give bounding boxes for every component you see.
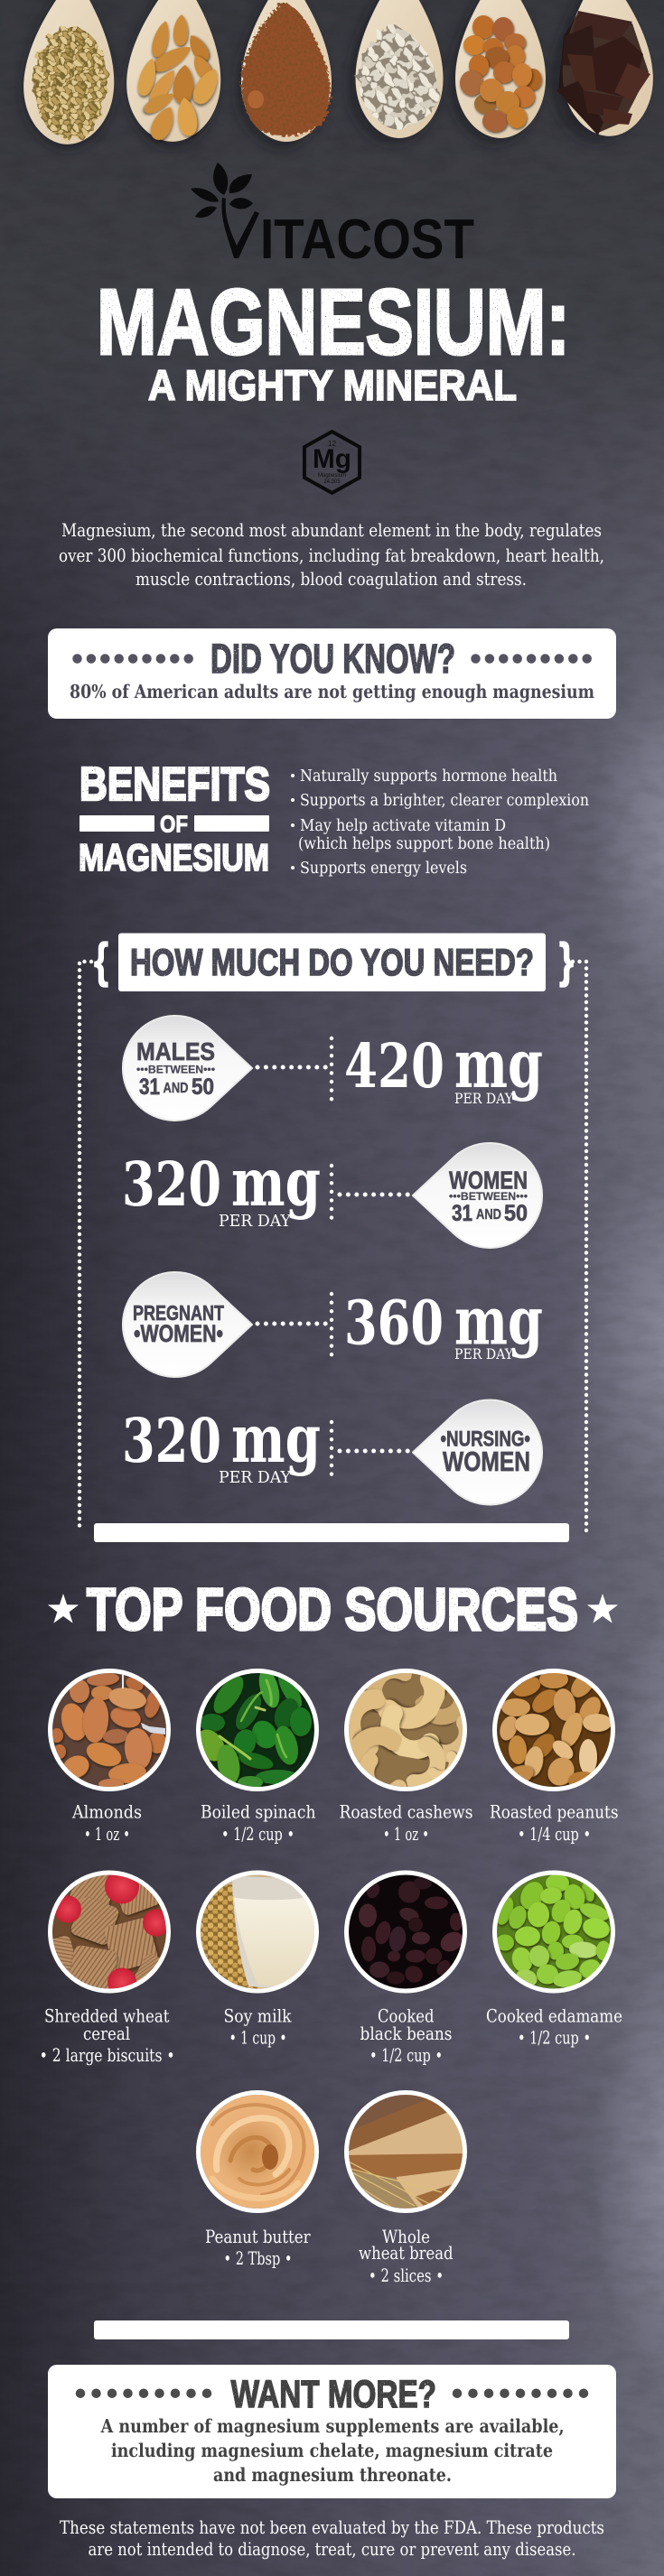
- spoon: dark chocolate: [556, 0, 656, 138]
- food: cooked edamame: • 1/2 cup •: [518, 2028, 591, 2049]
- panel: benefits: [79, 758, 589, 879]
- food: peanut butter: • 2 Tbsp •: [224, 2248, 293, 2269]
- amount: 320 mg: 320: [122, 1149, 221, 1220]
- food: cooked black beans: • 1/2 cup •: [369, 2045, 443, 2066]
- title: [97, 270, 570, 409]
- drop: pregnant women: PREGNANT: [133, 1301, 224, 1325]
- food: roasted cashews: Roasted cashews: [340, 1802, 473, 1822]
- spoon: sunflower seeds: [356, 0, 443, 138]
- spoon shadows: [23, 0, 641, 150]
- amount: 360 mg: mg: [454, 1282, 543, 1360]
- supplements text: A number of magnesium supplements are available,: [100, 2415, 565, 2437]
- spoon: cocoa powder: [241, 0, 332, 142]
- intro text: [59, 520, 604, 590]
- food: almonds: Almonds: [71, 1802, 142, 1822]
- food: whole wheat bread: Whole: [382, 2227, 430, 2247]
- benefits list: Supports energy levels: [300, 860, 467, 878]
- icon: leaves and V stem: [191, 163, 259, 258]
- food: roasted cashews: • 1 oz •: [383, 1824, 429, 1845]
- food: cooked black beans: black beans: [360, 2023, 452, 2044]
- row: women 31-50: PER DAY: [219, 1212, 292, 1231]
- title: A MIGHTY MINERAL: [148, 361, 517, 409]
- supplements text: and magnesium threonate.: [213, 2464, 452, 2486]
- food: peanut butter: Peanut butter: [205, 2227, 311, 2247]
- row: males: PER DAY: [454, 1090, 513, 1107]
- row: women 31-50: [122, 1143, 542, 1248]
- disclaimer: are not intended to diagnose, treat, cure or prevent any disease.: [89, 2539, 576, 2560]
- benefits list: Supports a brighter, clearer complexion: [300, 792, 589, 810]
- food: cooked black beans: [342, 1869, 469, 2066]
- food: roasted peanuts: Roasted peanuts: [490, 1802, 618, 1822]
- drop: pregnant women: •WOMEN•: [134, 1320, 223, 1347]
- drop: males: 31: [139, 1074, 160, 1100]
- drop: males: MALES: [136, 1037, 215, 1065]
- amount: 420 mg: 420: [344, 1030, 444, 1102]
- row: nursing women: PER DAY: [219, 1468, 292, 1487]
- food: shredded wheat cereal: • 2 large biscuits •: [40, 2045, 175, 2066]
- drop: women between 31 and 50: [413, 1143, 542, 1248]
- drop: women between 31 and 50: WOMEN: [449, 1167, 528, 1194]
- logo: Vitacost: [191, 163, 474, 271]
- spoon: buckwheat: [21, 0, 120, 146]
- panel: want more: [48, 2365, 616, 2498]
- food: cooked black beans: Cooked: [378, 2006, 434, 2027]
- divider bar: [94, 2320, 569, 2339]
- heading box: [94, 934, 574, 991]
- food: soy milk: • 1 cup •: [229, 2028, 287, 2049]
- amount: 420 mg: [344, 1026, 543, 1103]
- food: almonds: [46, 1667, 173, 1845]
- panel: did you know: [48, 628, 616, 719]
- intro text: muscle contractions, blood coagulation and stress.: [136, 569, 527, 590]
- food: cooked edamame: [486, 1869, 622, 2049]
- heading: want more: WANT MORE?: [231, 2373, 436, 2416]
- row: pregnant women: PER DAY: [454, 1345, 513, 1362]
- spoon: almonds: [124, 0, 226, 144]
- food: soy milk: [194, 1869, 321, 2049]
- food: almonds: • 1 oz •: [84, 1824, 130, 1845]
- benefits list: May help activate vitamin D: [300, 817, 506, 835]
- drop: nursing women: [413, 1400, 542, 1504]
- heading box: }: [559, 934, 574, 988]
- icon: Mg hexagon element: 24.305: [323, 479, 341, 485]
- heading: benefits of magnesium: [79, 758, 270, 879]
- icon: Mg hexagon element: [304, 432, 360, 493]
- amount: 420 mg: mg: [454, 1026, 543, 1103]
- row: pregnant women: [123, 1272, 543, 1377]
- food: boiled spinach: [191, 1667, 321, 1845]
- amount: 320 mg: mg: [231, 1144, 321, 1222]
- food: boiled spinach: Boiled spinach: [201, 1802, 316, 1822]
- amount: 360 mg: 360: [344, 1288, 444, 1358]
- disclaimer: [60, 2517, 604, 2560]
- drop: women between 31 and 50: 31: [452, 1201, 472, 1226]
- food: roasted peanuts: [490, 1667, 618, 1845]
- supplements text: including magnesium chelate, magnesium citrate: [111, 2440, 553, 2461]
- panel: how much do you need: [79, 934, 586, 1542]
- supplements text: [100, 2415, 565, 2486]
- amount: 360 mg: [344, 1282, 543, 1360]
- drop: women between 31 and 50: •••BETWEEN•••: [449, 1192, 528, 1203]
- icon: Mg hexagon element: Mg: [313, 444, 351, 474]
- drop: males: AND: [163, 1081, 188, 1096]
- drop: males: •••BETWEEN•••: [136, 1065, 215, 1076]
- heading: benefits of magnesium: BENEFITS: [79, 758, 270, 811]
- amount: 320 mg nursing: mg: [231, 1400, 321, 1478]
- drop: males: [123, 1016, 252, 1121]
- heading: did you know: DID YOU KNOW?: [210, 636, 455, 682]
- heading box: HOW MUCH DO YOU NEED?: [130, 941, 534, 983]
- drop: women between 31 and 50: 50: [504, 1201, 528, 1226]
- dotted frame: [79, 962, 586, 1532]
- drop: pregnant women: [123, 1272, 252, 1377]
- food: roasted cashews: [340, 1667, 473, 1845]
- amount: 320 mg nursing: [122, 1400, 321, 1478]
- spoon: hazelnuts: [455, 0, 546, 138]
- food: cooked edamame: Cooked edamame: [486, 2006, 622, 2027]
- closing bar: [94, 1523, 569, 1542]
- spoons with foods: [21, 0, 656, 150]
- food: shredded wheat cereal: [42, 1871, 173, 2066]
- wordmark: ITACOST: [260, 209, 474, 271]
- food: boiled spinach: • 1/2 cup •: [221, 1824, 295, 1845]
- icon: Mg hexagon element: 12: [328, 440, 336, 448]
- food: shredded wheat cereal: cereal: [83, 2023, 130, 2044]
- food: soy milk: Soy milk: [224, 2006, 292, 2027]
- food: whole wheat bread: wheat bread: [359, 2243, 454, 2264]
- drop: males: 50: [192, 1074, 214, 1100]
- benefits list: Naturally supports hormone health: [300, 767, 557, 786]
- benefits list: [291, 767, 589, 878]
- food: whole wheat bread: • 2 slices •: [369, 2265, 444, 2286]
- row: nursing women: [122, 1400, 542, 1504]
- amount: 320 mg nursing: 320: [122, 1405, 221, 1476]
- drop: nursing women: •NURSING•: [441, 1427, 530, 1452]
- benefits list: (which helps support bone health): [298, 835, 550, 853]
- heading box: {: [94, 934, 108, 988]
- heading: benefits of magnesium: OF: [160, 811, 188, 838]
- heading: benefits of magnesium: MAGNESIUM: [79, 836, 269, 879]
- food: peanut butter: [194, 2088, 321, 2269]
- food: roasted peanuts: • 1/4 cup •: [518, 1824, 591, 1845]
- food: shredded wheat cereal: Shredded wheat: [44, 2006, 170, 2027]
- drop: nursing women: WOMEN: [443, 1446, 530, 1477]
- icon: Mg hexagon element: Magnesium: [318, 473, 346, 479]
- drop: women between 31 and 50: AND: [476, 1207, 501, 1223]
- food: whole wheat bread: [342, 2079, 469, 2286]
- amount: 320 mg: [122, 1144, 321, 1222]
- row: males: [123, 1016, 543, 1121]
